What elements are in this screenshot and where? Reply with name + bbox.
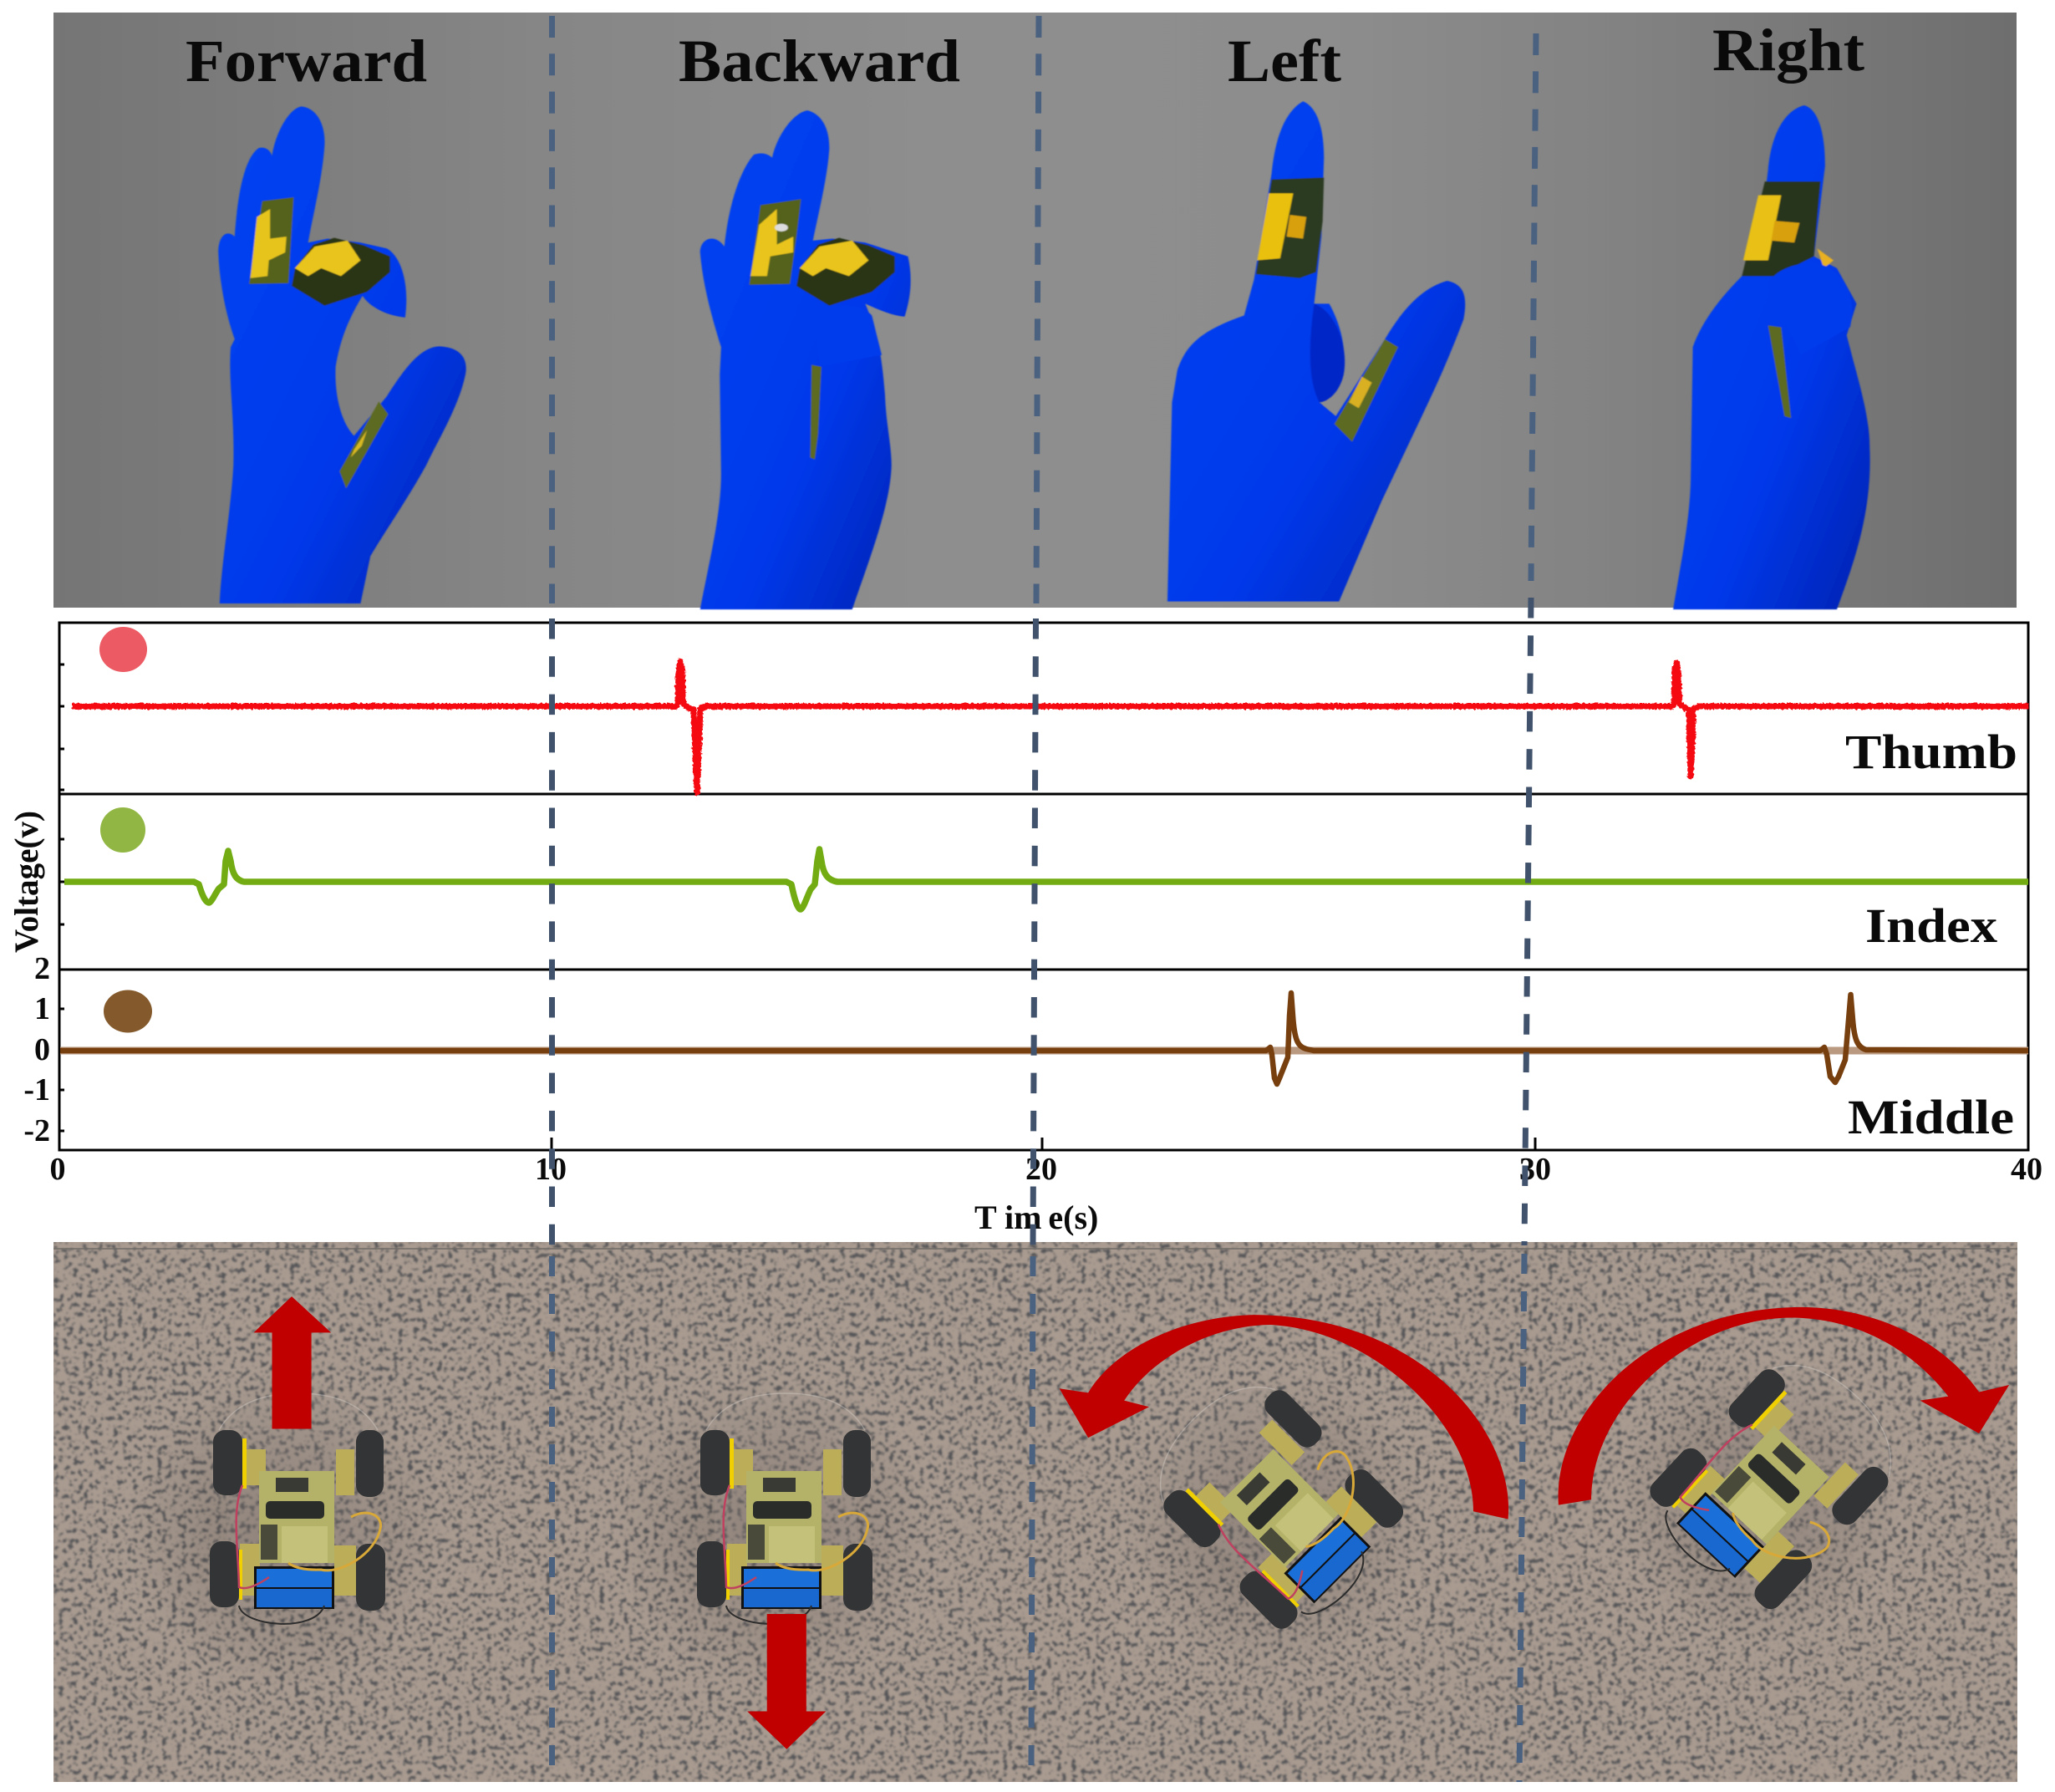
marker: index dot xyxy=(100,807,145,853)
panel: gesture photographs xyxy=(53,13,2017,609)
x axis tick labels: 0 xyxy=(50,1152,65,1187)
chart: finger voltage traces over time xyxy=(8,623,2042,1236)
car: turning right xyxy=(1634,1336,1920,1624)
heading: Backward: Backward xyxy=(679,28,960,94)
y axis title: Voltage(v) xyxy=(8,811,45,953)
x axis tick labels: 40 xyxy=(2011,1152,2042,1187)
heading: Forward: Forward xyxy=(186,28,427,94)
y axis tick labels: 0 xyxy=(34,1032,50,1067)
label: Middle: Middle xyxy=(1848,1090,2014,1144)
y axis tick labels: -2 xyxy=(23,1113,50,1148)
divider: 10 s xyxy=(549,16,555,1767)
arrow: forward xyxy=(254,1296,331,1429)
trace: index xyxy=(64,849,2028,909)
car: backward xyxy=(697,1393,872,1624)
marker: middle dot xyxy=(104,990,152,1033)
divider: 30 s xyxy=(1519,33,1536,1782)
arrow: backward xyxy=(747,1614,826,1749)
y axis tick labels: 1 xyxy=(34,991,50,1026)
x axis title: Time(s) xyxy=(974,1199,1098,1236)
hand: backward gesture xyxy=(700,110,911,609)
heading: Left: Left xyxy=(1228,28,1341,94)
trace: thumb xyxy=(72,661,2028,792)
x axis tick labels: 20 xyxy=(1025,1152,1057,1187)
y axis tick labels xyxy=(23,951,50,1148)
divider: 20 s xyxy=(1031,16,1039,1767)
y axis tick labels: 2 xyxy=(34,951,50,986)
x axis tick labels: 10 xyxy=(535,1152,567,1187)
hand: right gesture xyxy=(1673,105,1870,609)
hand: left gesture xyxy=(1167,101,1465,602)
label: Index: Index xyxy=(1865,899,1997,953)
panel: robot car photographs xyxy=(53,1242,2017,1782)
trace: middle xyxy=(60,993,2028,1084)
x axis tick labels xyxy=(50,1152,2042,1187)
hand: forward gesture xyxy=(218,106,466,603)
marker: thumb dot xyxy=(99,627,147,672)
arrow: curved left xyxy=(1060,1315,1508,1520)
car: turning left xyxy=(1131,1358,1417,1646)
arrow: curved right xyxy=(1559,1307,2009,1505)
x axis tick labels: 30 xyxy=(1519,1152,1551,1187)
car: forward xyxy=(210,1393,385,1624)
label: Thumb: Thumb xyxy=(1845,725,2017,779)
heading: Right: Right xyxy=(1712,17,1864,84)
y axis tick labels: -1 xyxy=(23,1072,50,1107)
